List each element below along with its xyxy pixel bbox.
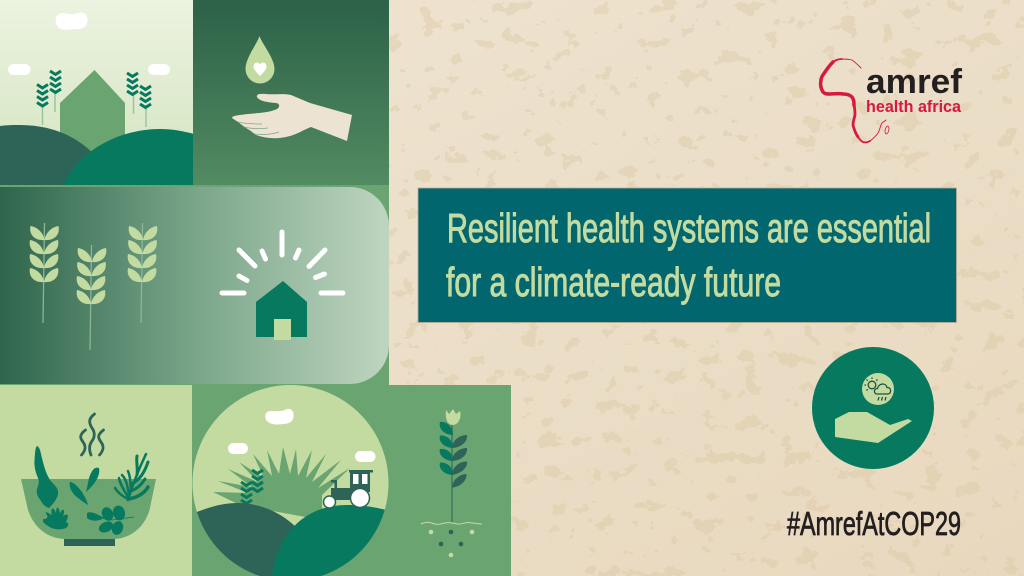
water drop with heart (246, 36, 274, 84)
panel: farm scene circle with tractor (190, 385, 390, 576)
logo: amref health africa (821, 59, 963, 142)
open hand (232, 94, 352, 141)
small house (256, 281, 307, 340)
panel: hand and water drop (193, 0, 389, 187)
panel: bottom right green background (192, 385, 511, 576)
clouds (8, 12, 170, 75)
headline text (446, 205, 931, 305)
plant with roots (421, 409, 482, 557)
panel: herbal bowl (0, 385, 192, 576)
icon: hand with weather circle (812, 347, 934, 469)
right leaves (452, 435, 467, 488)
headline text: for a climate-ready future (446, 259, 781, 305)
panel: wheat and house gradient band (0, 185, 389, 385)
house (60, 70, 125, 160)
leafy sprig (87, 504, 134, 536)
clouds (228, 409, 376, 462)
seeds (429, 530, 474, 557)
leaves in bowl (70, 468, 99, 505)
flower (446, 409, 461, 425)
gourd (34, 446, 58, 508)
weather icon (862, 373, 894, 405)
herb tuft (43, 508, 68, 529)
sun rays (222, 232, 343, 293)
ground line (421, 522, 482, 524)
Africa outline (821, 59, 890, 142)
wheat (241, 470, 263, 507)
hills (0, 125, 194, 186)
tractor (324, 470, 373, 508)
amref wordmark: amref (866, 63, 963, 101)
left leaves (440, 422, 453, 475)
health africa wordmark: health africa (866, 97, 962, 116)
fern (115, 454, 148, 500)
wheat stalks (37, 71, 151, 127)
bowl base (64, 539, 115, 546)
headline box (418, 188, 956, 322)
wheat stalks (30, 223, 157, 350)
bowl (21, 479, 156, 539)
hand (835, 412, 912, 443)
sun burst (213, 447, 350, 520)
hills (190, 503, 296, 576)
steam (81, 414, 104, 455)
panel: house on green hills (0, 0, 194, 186)
